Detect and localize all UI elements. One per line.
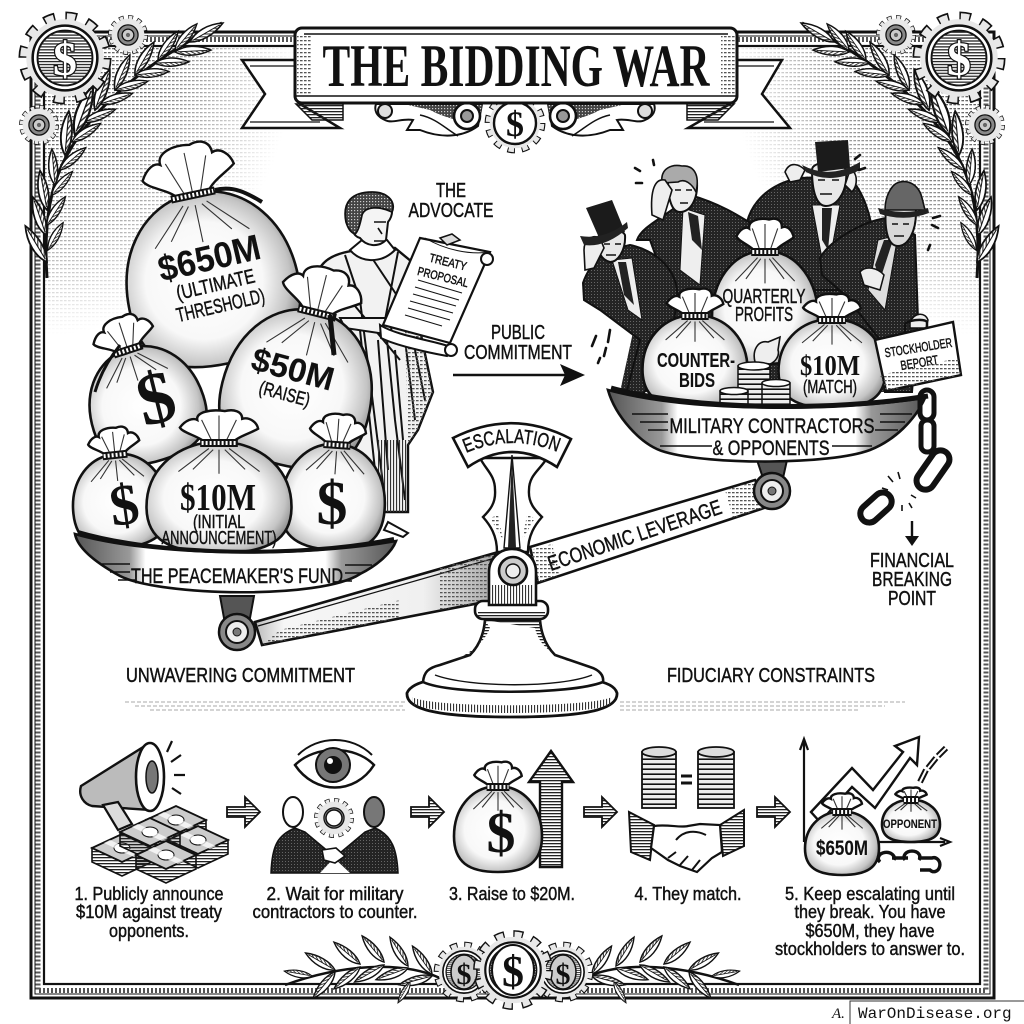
money bag dollar lower left — [65, 423, 172, 552]
corner gears top left: $ — [53, 33, 77, 86]
arrow 3 to 4 — [584, 797, 617, 827]
step 3 icon: bag with up arrow: $ — [486, 800, 516, 865]
man 2 bare head — [637, 166, 765, 295]
watermark — [831, 1001, 1024, 1024]
advocate label: THE — [436, 180, 466, 202]
step 2 icon: eye, gear, two men — [271, 740, 398, 873]
scale beam right arm with label: ECONOMIC LEVERAGE — [545, 496, 725, 576]
step 5 icon: rising chart, bags and chain: OPPONENT — [883, 817, 938, 831]
money bag quarterly profits — [712, 219, 818, 364]
bottom ornament: laurels and dollar gears: $ — [456, 958, 472, 991]
arrow 2 to 3 — [411, 797, 444, 827]
sweat drops — [592, 155, 940, 363]
right scale pan: & OPPONENTS — [712, 437, 830, 460]
advocate label — [408, 180, 494, 222]
money bag $10M match: $10M — [800, 350, 860, 382]
financial breaking point label: BREAKING — [872, 569, 952, 591]
money bag quarterly profits: QUARTERLY — [722, 286, 806, 308]
step 1 caption — [74, 884, 224, 941]
dark suits behind the bags — [620, 225, 890, 392]
money bag dollar left: $ — [128, 354, 184, 443]
right scale pan: MILITARY CONTRACTORS — [670, 415, 874, 438]
left scale pan: THE PEACEMAKER'S FUND — [131, 565, 343, 588]
money bag $50M: $50M — [248, 340, 338, 398]
money bag $650M: $650M — [154, 226, 264, 289]
fiduciary constraints label: FIDUCIARY CONSTRAINTS — [667, 665, 875, 687]
money bag $650M — [98, 127, 313, 381]
small mouse — [754, 337, 780, 364]
left scale pan — [75, 532, 396, 650]
step 1 caption: 1. Publicly announce — [74, 884, 224, 904]
men shaking hands — [271, 828, 398, 873]
step 1 caption: $10M against treaty — [76, 902, 222, 922]
unwavering commitment label: UNWAVERING COMMITMENT — [126, 665, 355, 687]
money bag counter-bids: COUNTER- — [657, 350, 735, 372]
title ribbon banner — [242, 28, 790, 128]
watermark: WarOnDisease.org — [858, 1005, 1012, 1023]
eye — [295, 740, 374, 788]
money bag $50M — [206, 250, 401, 483]
financial breaking point label — [870, 550, 954, 610]
right corner laurel branch — [799, 19, 1003, 278]
icon: treaty scroll: TREATY — [428, 251, 468, 274]
financial breaking point label: FINANCIAL — [870, 550, 954, 572]
money bag counter-bids: BIDS — [679, 370, 715, 392]
corner gears top left — [21, 17, 146, 143]
financial breaking point label: POINT — [888, 588, 936, 610]
figure: the advocate in toga with treaty scroll — [317, 192, 493, 537]
arrow 1 to 2 — [227, 797, 260, 827]
step 1 caption: opponents. — [109, 921, 189, 941]
public commitment label and arrow: PUBLIC — [491, 322, 545, 344]
escalation banner: ESCALATION — [462, 429, 562, 453]
corner gears top right: $ — [947, 33, 971, 86]
corner halftone shading — [45, 46, 979, 336]
bottom ornament: laurels and dollar gears: $ — [556, 958, 570, 991]
briefcase stockholder report: STOCKHOLDER — [884, 335, 953, 360]
money bag $10M: ANNOUNCEMENT) — [162, 528, 276, 548]
money bag dollar left — [63, 300, 218, 477]
title ornament with dollar gear — [375, 96, 655, 150]
money bag $10M match: (MATCH) — [803, 377, 857, 397]
step 5 caption: they break. You have — [794, 902, 946, 922]
step 5 icon: rising chart, bags and chain: $650M — [816, 837, 868, 860]
money bag $10M: $10M — [180, 477, 256, 519]
step 5 caption: stockholders to answer to. — [775, 939, 965, 959]
money bag $50M: (RAISE) — [257, 378, 312, 412]
right pan pivot — [754, 473, 790, 509]
briefcase stockholder report: BEPORT — [899, 352, 939, 373]
step 1 icon: megaphone and cash — [80, 741, 228, 883]
bottom ornament: laurels and dollar gears — [284, 933, 740, 1005]
step 4 caption: 4. They match. — [634, 884, 742, 904]
step 3 caption: 3. Raise to $20M. — [449, 884, 575, 904]
coin stacks — [720, 362, 790, 407]
step 4 icon: equal coin stacks and handshake — [629, 747, 744, 872]
fulcrum stand — [407, 455, 617, 717]
step 5 caption: $650M, they have — [806, 921, 934, 941]
escalation banner — [451, 422, 573, 469]
scale beam left arm — [255, 553, 495, 645]
left corner laurel branch — [21, 19, 225, 278]
icon: treaty scroll: PROPOSAL — [416, 264, 470, 290]
step 5 icon: rising chart, bags and chain — [800, 737, 950, 875]
money bag $10M: (INITIAL — [193, 512, 245, 532]
megaphone — [80, 741, 185, 830]
watermark: A. — [831, 1006, 845, 1022]
money bag $10M match — [778, 294, 886, 408]
money bag $650M: (ULTIMATE — [174, 265, 257, 305]
public commitment label and arrow — [453, 322, 585, 386]
left pan pivot — [219, 614, 255, 650]
money bag dollar lower right — [278, 410, 391, 553]
step 5 caption: 5. Keep escalating until — [785, 884, 955, 904]
money bag dollar lower right: $ — [316, 470, 348, 538]
step 5 caption — [775, 884, 965, 959]
money bag dollar lower left: $ — [105, 470, 143, 539]
title text: THE BIDDING WAR — [322, 33, 710, 99]
advocate label: ADVOCATE — [408, 200, 494, 222]
icon: treaty scroll — [380, 234, 493, 356]
cash stacks — [92, 806, 228, 883]
title ornament with dollar gear: $ — [506, 104, 524, 144]
ground shading — [125, 702, 905, 710]
man 1 top hat left — [580, 200, 677, 398]
broken chain — [857, 390, 953, 546]
bottom ornament: laurels and dollar gears: $ — [502, 947, 524, 996]
step 2 caption: 2. Wait for military — [266, 884, 404, 904]
money bag quarterly profits: PROFITS — [735, 304, 793, 326]
man 3 top hat — [747, 140, 873, 290]
step 2 caption — [252, 884, 418, 922]
corner gears top right — [878, 17, 1003, 143]
opponents group of panicked men — [580, 140, 940, 398]
man 4 bowler and briefcase — [820, 182, 929, 392]
step 3 icon: bag with up arrow — [454, 751, 573, 872]
right scale pan — [608, 388, 928, 509]
money bag counter-bids — [642, 289, 748, 408]
public commitment label and arrow: COMMITMENT — [464, 342, 572, 364]
money bag $10M — [146, 410, 292, 553]
arrow 4 to 5 — [757, 797, 790, 827]
step 2 caption: contractors to counter. — [252, 902, 418, 922]
money bag $650M: THRESHOLD) — [174, 285, 267, 327]
briefcase stockholder report — [875, 320, 961, 391]
